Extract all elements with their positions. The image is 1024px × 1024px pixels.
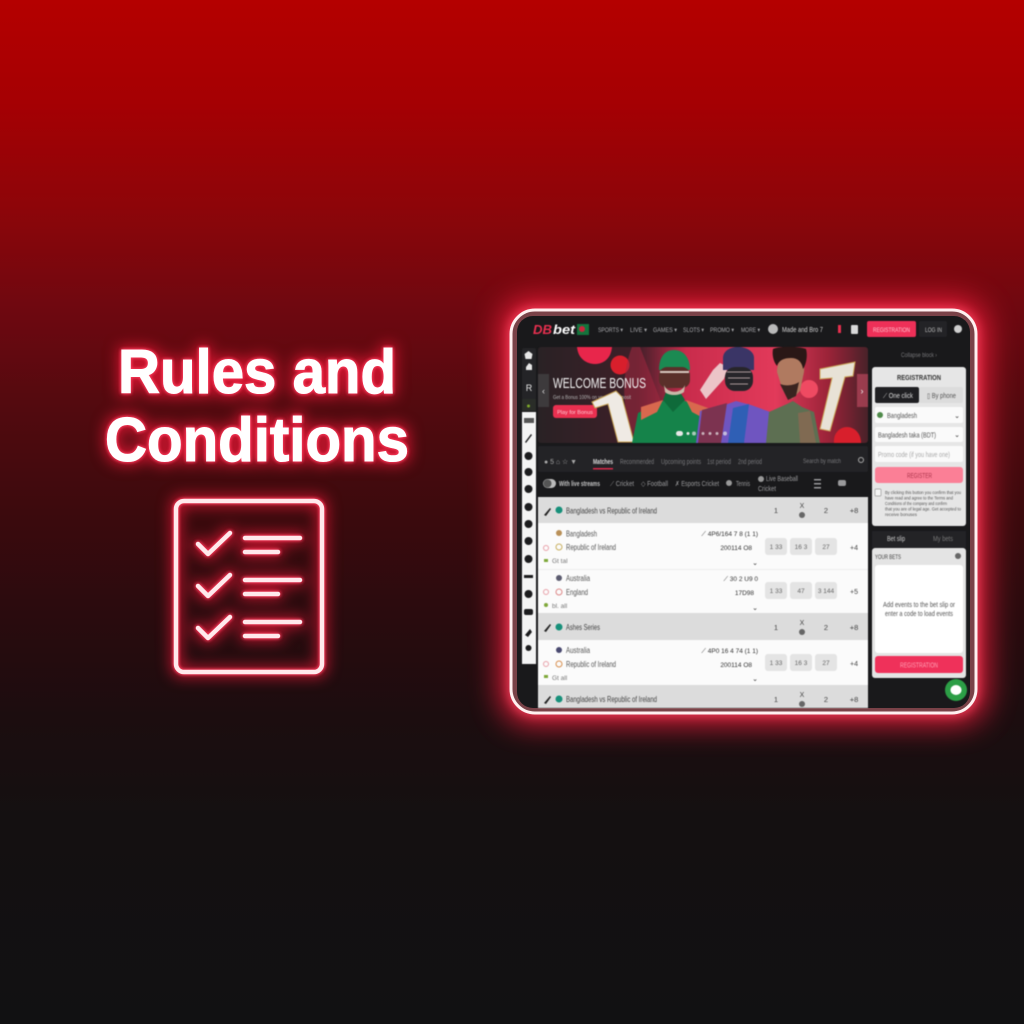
period tabs: 2nd period	[738, 459, 762, 466]
log in button	[919, 321, 947, 337]
terms text: receive bonuses	[885, 512, 917, 517]
sport filters	[610, 476, 798, 493]
sport filters: Tennis	[736, 481, 750, 488]
section row: Bangladesh vs Republic of Ireland: +8	[850, 695, 858, 704]
left carousel arrow	[538, 374, 549, 407]
icon: neon checklist	[176, 501, 322, 672]
icon: green chat bubble	[945, 679, 967, 701]
section row: Bangladesh vs Republic of Ireland: X	[800, 692, 805, 699]
registration button	[867, 321, 916, 337]
sport filters: ✗ Esports Cricket	[675, 480, 719, 488]
logo: bet	[553, 322, 576, 337]
title: Conditions	[105, 406, 409, 475]
left golden one	[592, 391, 634, 442]
match: Bangladesh v Ireland: 1 33	[770, 544, 783, 551]
navigation: MORE ▾	[741, 327, 761, 334]
match: Australia v England: +5	[850, 589, 858, 596]
match: Bangladesh v Ireland: ⌄	[752, 560, 758, 567]
navigation: LIVE ▾	[630, 327, 648, 334]
match: Australia v England: 47	[797, 588, 805, 595]
promo code input	[875, 446, 963, 462]
section row: Bangladesh vs Republic of Ireland: X	[800, 503, 805, 510]
registration heading: REGISTRATION	[897, 375, 941, 382]
right golden one	[820, 362, 855, 431]
filter menu icons	[814, 479, 846, 488]
carousel dots	[676, 431, 727, 436]
tab labels: My bets	[933, 536, 953, 543]
match: Australia v Ireland: +4	[850, 661, 858, 668]
match filters	[538, 446, 868, 493]
match: Australia v England: 1 33	[770, 588, 783, 595]
live toggle	[543, 479, 600, 488]
tab: by phone	[919, 387, 963, 403]
country select	[875, 407, 963, 423]
currency select: Bangladesh taka (BDT)	[878, 430, 936, 440]
banner subtext: Get a Bonus 100% on your first deposit	[553, 395, 631, 401]
terms text: that you are of legal age. Get accepted to	[885, 506, 962, 512]
bet slip registration button: REGISTRATION	[900, 662, 938, 670]
sport filters: ⟋ Cricket	[610, 480, 634, 488]
match: Australia v England: England	[566, 588, 588, 597]
bet slip registration button	[875, 656, 963, 673]
banner	[538, 347, 868, 443]
sidebar dark icons: R	[526, 383, 533, 393]
match: Australia v Ireland: 27	[822, 660, 830, 667]
section row: Bangladesh vs Republic of Ireland: Bangladesh vs Republic of Ireland	[566, 506, 657, 516]
tab: one click: ⟋ One click	[883, 392, 913, 400]
filter tabs background	[538, 446, 868, 472]
match: Bangladesh v Ireland: 200114 O8	[720, 545, 752, 552]
banner decor circles	[577, 347, 818, 443]
site content	[522, 321, 967, 708]
section row: Ashes Series: +8	[850, 623, 858, 632]
tab: one click	[875, 387, 919, 403]
section row: Ashes Series: 2	[824, 623, 828, 632]
navigation	[598, 327, 761, 334]
tablet glow	[500, 299, 987, 724]
terms text: By clicking this button you confirm that you	[885, 490, 962, 495]
match: Bangladesh v Ireland: 16 3	[795, 544, 808, 551]
section row: Bangladesh vs Republic of Ireland: 2	[824, 506, 828, 515]
match: Australia v Ireland	[544, 646, 858, 683]
country select: ⌄	[954, 413, 960, 420]
navigation: PROMO ▾	[710, 327, 735, 334]
terms text: Conditions of the company and confirm	[885, 501, 947, 506]
collapse block link: Collapse block ›	[901, 352, 937, 359]
match: Australia v England: ⌄	[752, 605, 758, 612]
sport filters: ◇ Football	[641, 481, 668, 488]
bet slip card	[872, 548, 966, 678]
section row: Bangladesh vs Republic of Ireland: 1	[774, 506, 778, 515]
tablet screen	[517, 316, 970, 708]
settings icon	[955, 553, 961, 559]
logo	[533, 322, 589, 337]
match: Australia v Ireland: Australia	[566, 646, 590, 655]
red ball	[834, 427, 861, 443]
tablet frame	[511, 310, 976, 713]
terms checkbox	[875, 489, 881, 496]
navigation: SLOTS ▾	[683, 327, 705, 334]
empty state card	[875, 565, 963, 653]
period tabs: Recommended	[620, 459, 654, 466]
match: Australia v England: Australia	[566, 574, 590, 583]
section row: Bangladesh vs Republic of Ireland: +8	[850, 506, 858, 515]
title	[105, 338, 409, 475]
match: Australia v England: 17D98	[735, 590, 754, 597]
left carousel arrow: ‹	[542, 386, 545, 396]
section row: Bangladesh vs Republic of Ireland: Bangladesh vs Republic of Ireland	[566, 695, 657, 704]
match: Bangladesh v Ireland: Gt tal	[552, 558, 568, 565]
tab labels: Bet slip	[887, 536, 905, 543]
match: Bangladesh v Ireland: ⟋ 4P6/164 7 8 (1 1)	[701, 531, 758, 538]
panel: registration	[872, 367, 966, 526]
search field: Search by match	[803, 458, 841, 465]
bet slip tab bar	[872, 531, 966, 548]
match: Australia v Ireland: Republic of Ireland	[566, 660, 616, 669]
match: Australia v England	[538, 569, 868, 612]
section row: Ashes Series: 1	[774, 623, 778, 632]
active tab underline	[593, 468, 613, 470]
player 2	[696, 347, 781, 443]
registration card	[872, 367, 966, 526]
player 3	[766, 347, 820, 443]
banner background	[538, 347, 868, 443]
match: Bangladesh v Ireland: +4	[850, 545, 858, 552]
empty state message	[883, 600, 955, 618]
sport filters: Cricket	[758, 486, 776, 493]
section row: Bangladesh vs Republic of Ireland	[538, 685, 868, 708]
sidebar	[522, 348, 536, 664]
navigation: GAMES ▾	[653, 327, 678, 334]
tab icons: ● 5 ⌂ ☆ ▼	[544, 458, 577, 466]
match: Bangladesh v Ireland: Republic of Ireland	[566, 543, 616, 552]
section row: Ashes Series: X	[800, 620, 805, 627]
logo: DB	[533, 322, 552, 337]
player 1	[632, 350, 717, 443]
user icon	[954, 325, 962, 333]
match: Australia v Ireland: ⌄	[752, 676, 758, 683]
match: Bangladesh v Ireland: Bangladesh	[566, 530, 597, 538]
live toggle: With live streams	[559, 481, 600, 488]
banner button: Play for Bonus	[557, 410, 593, 416]
sidebar white icons	[522, 412, 536, 664]
right carousel arrow: ›	[860, 386, 864, 396]
tab labels	[887, 536, 953, 543]
tab: by phone: ▯ By phone	[927, 393, 956, 400]
your bets heading: YOUR BETS	[875, 555, 901, 561]
section row: Ashes Series: Ashes Series	[566, 623, 600, 632]
empty state message: enter a code to load events	[885, 609, 953, 618]
section row: Ashes Series	[538, 613, 868, 640]
currency select: ⌄	[954, 432, 960, 439]
match: Australia v Ireland: 16 3	[795, 660, 808, 667]
match: Australia v Ireland: ⟋ 4P0 16 4 74 (1 1)	[701, 648, 758, 655]
match: Australia v England: ⟋ 30 2 U9 0	[723, 576, 758, 583]
section row: Bangladesh vs Republic of Ireland: 1	[774, 695, 778, 704]
period tabs	[593, 459, 762, 466]
promo code input: Promo code (if you have one)	[878, 452, 950, 459]
promo text: Made and Bro 7	[782, 325, 823, 334]
period tabs: Upcoming points	[661, 459, 701, 466]
period tabs: 1st period	[707, 459, 731, 466]
sport filters: Live Baseball	[766, 476, 798, 483]
register button	[875, 467, 963, 483]
terms text: have read and agree to the Terms and	[885, 496, 954, 500]
navigation: SPORTS ▾	[598, 327, 624, 334]
empty state message: Add events to the bet slip or	[883, 600, 955, 609]
section row: Bangladesh vs Republic of Ireland: 2	[824, 695, 828, 704]
match: Australia v Ireland: Gt all	[552, 675, 568, 682]
match: Australia v Ireland: 1 33	[770, 660, 783, 667]
search icon	[858, 458, 864, 462]
right carousel arrow	[857, 374, 868, 407]
currency select	[875, 427, 963, 442]
match table	[538, 497, 868, 708]
match: Australia v England: 3 144	[818, 588, 835, 595]
table body	[538, 497, 868, 708]
promo text	[768, 324, 823, 334]
registration button: REGISTRATION	[873, 327, 910, 334]
log in button: LOG IN	[925, 327, 942, 334]
header icons	[838, 325, 858, 334]
header bar	[533, 321, 962, 337]
sidebar dark icons	[522, 348, 536, 411]
register button: REGISTER	[907, 473, 932, 480]
title: Rules and	[118, 338, 396, 407]
country select: Bangladesh	[887, 411, 917, 420]
match: Australia v Ireland: 200114 O8	[720, 662, 752, 669]
section row: Bangladesh vs Republic of Ireland	[538, 497, 868, 523]
panel: bet slip	[872, 531, 966, 678]
match: Bangladesh v Ireland: 27	[822, 544, 830, 551]
match: Australia v England: bl. all	[552, 603, 568, 610]
match: Bangladesh v Ireland	[544, 530, 858, 567]
panel: tablet screenshot	[511, 310, 976, 713]
terms text	[885, 490, 962, 517]
welcome bonus heading: WELCOME BONUS	[553, 376, 646, 392]
banner button	[553, 405, 597, 418]
period tabs: Matches	[593, 459, 613, 466]
